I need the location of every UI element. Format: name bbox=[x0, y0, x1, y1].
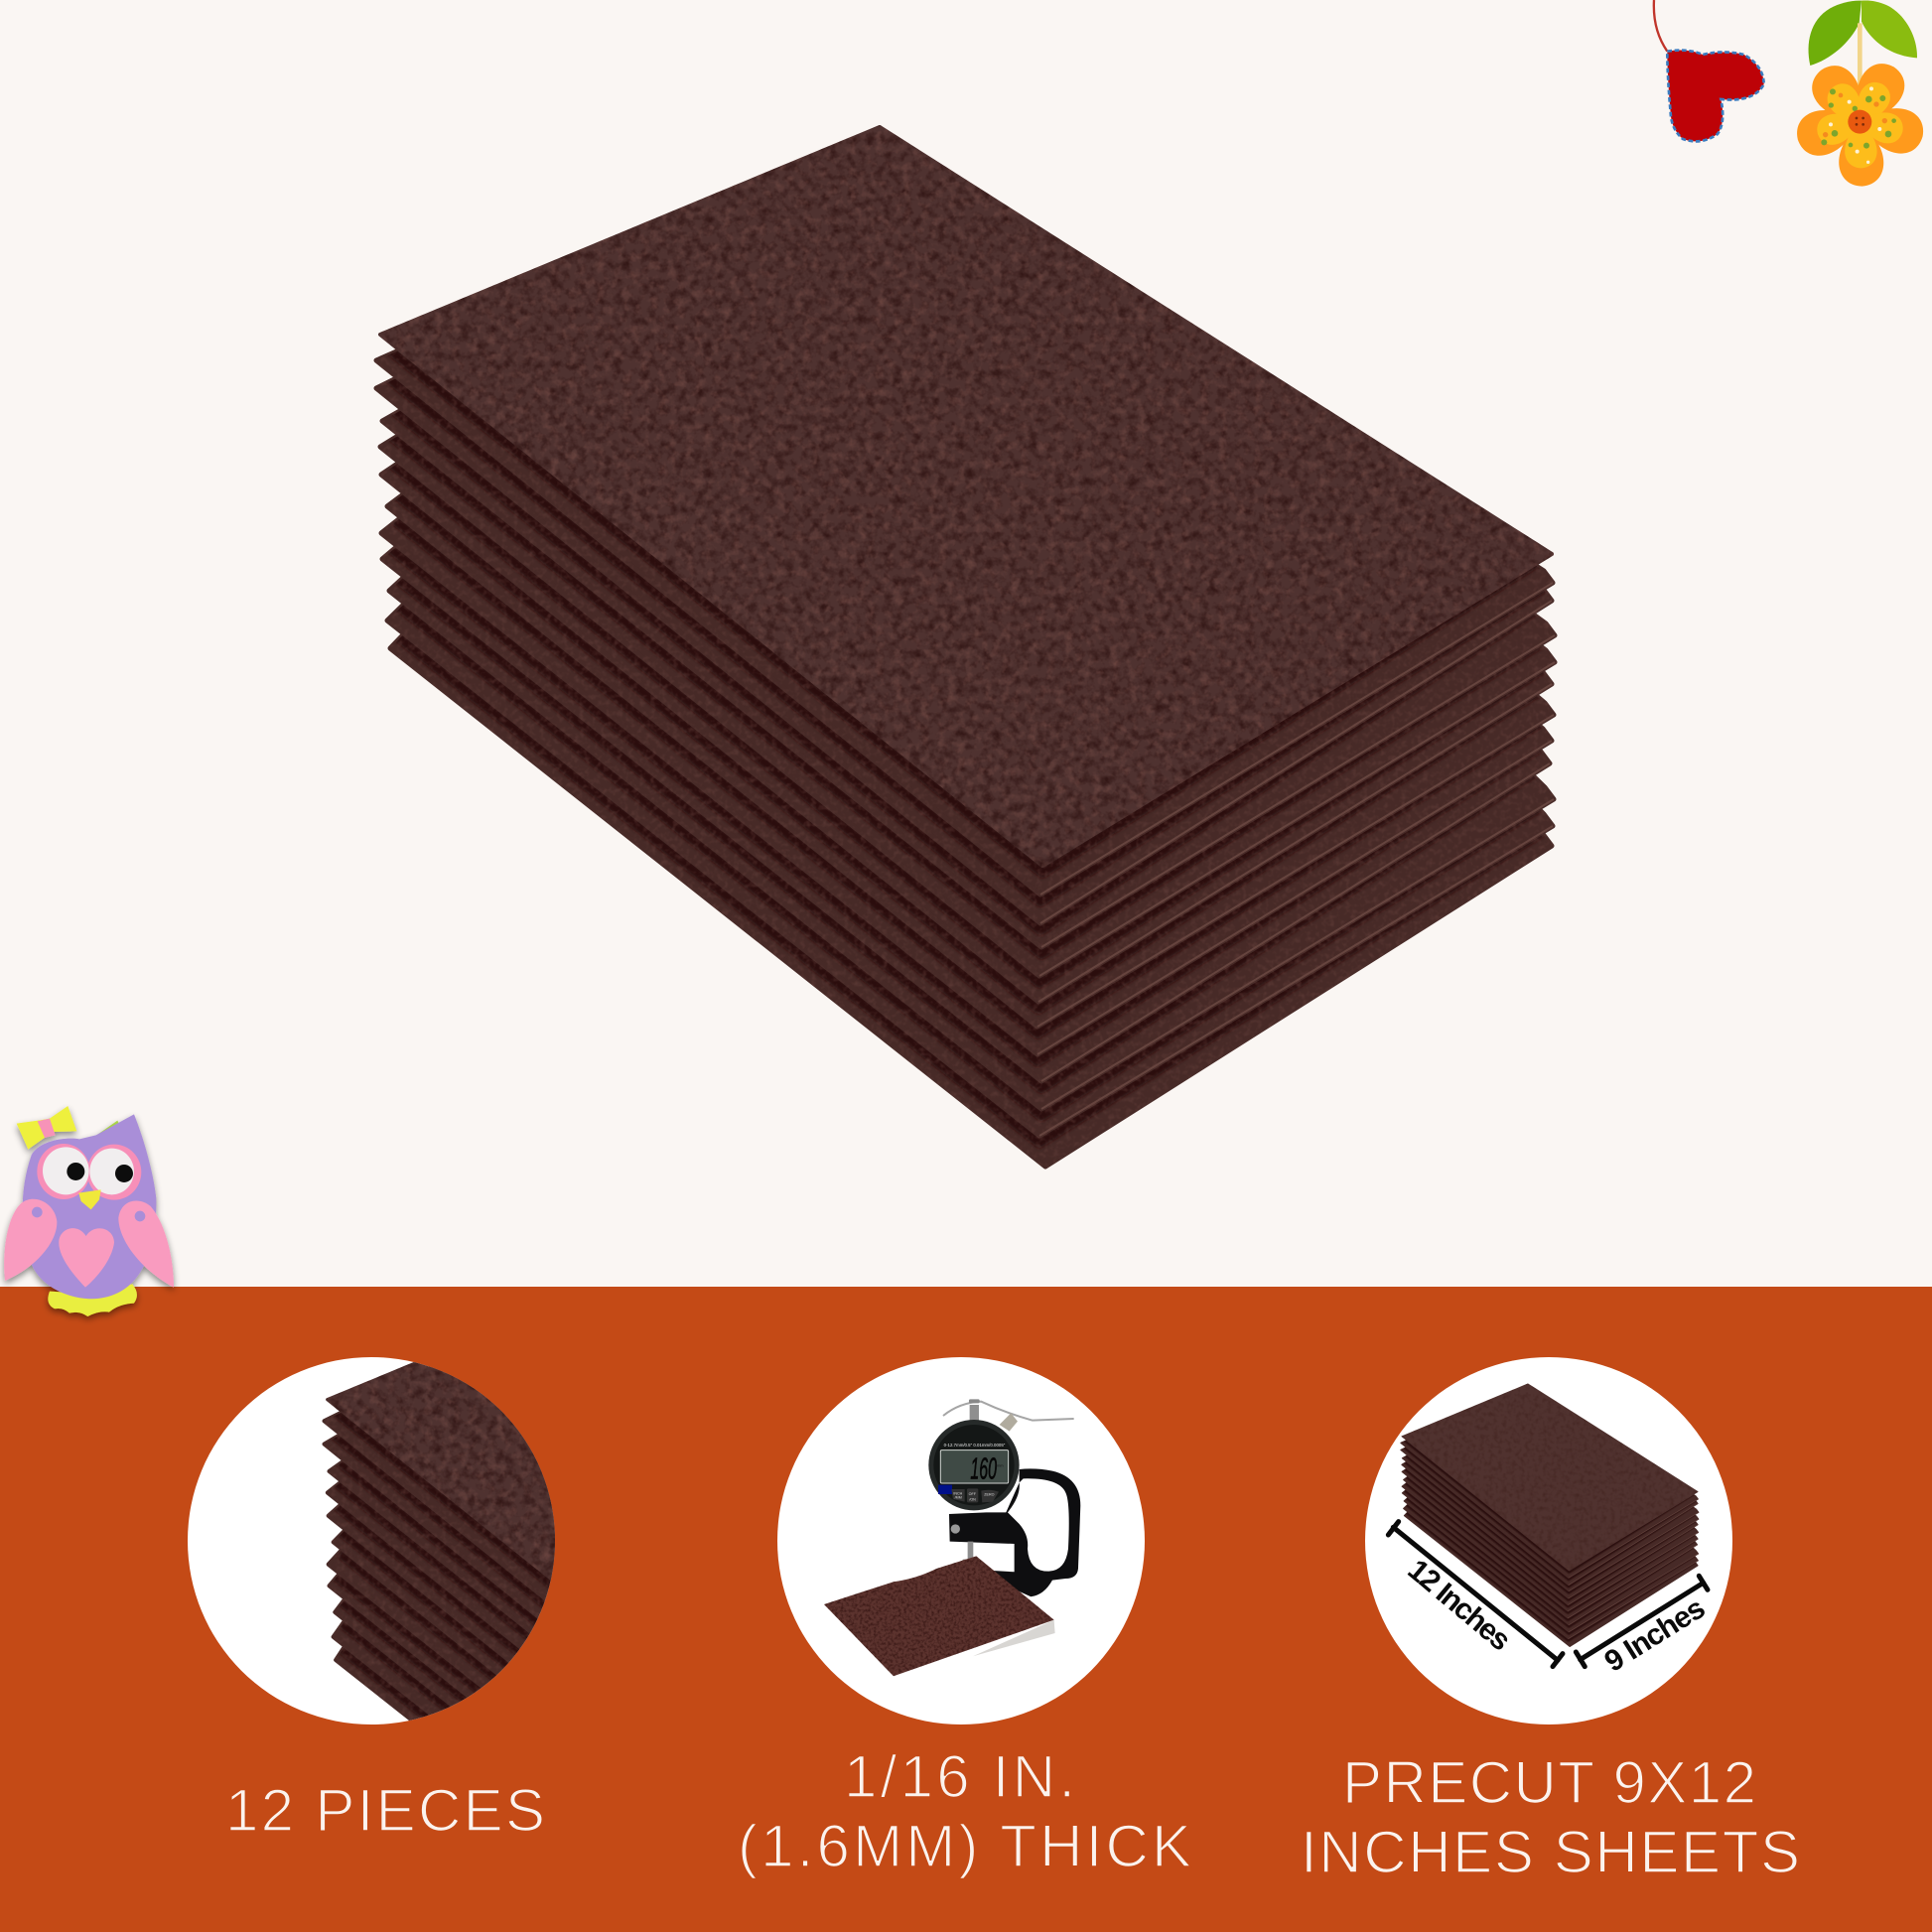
icon: digital thickness gauge on felt: /MM bbox=[955, 1495, 962, 1499]
panel: dimensions circle bbox=[1365, 1357, 1732, 1725]
dimension arrows and labels bbox=[1388, 1522, 1711, 1679]
caption: sheet size: INCHES SHEETS bbox=[1301, 1819, 1800, 1885]
caption: thickness bbox=[738, 1743, 1191, 1879]
panel: 12 pieces circle bbox=[188, 1357, 555, 1725]
top felt sheet bbox=[380, 127, 1552, 866]
caption: thickness: (1.6MM) THICK bbox=[738, 1813, 1191, 1879]
main stack of brown felt sheets bbox=[376, 127, 1555, 1167]
icon: digital thickness gauge on felt: 160 bbox=[970, 1452, 997, 1486]
owl heart bbox=[59, 1228, 114, 1288]
icon: digital thickness gauge on felt: INCH bbox=[953, 1491, 963, 1495]
icon: felt owl bbox=[4, 1106, 174, 1316]
owl eyes bbox=[37, 1144, 141, 1200]
icon: digital thickness gauge on felt bbox=[824, 1399, 1080, 1676]
panel: thickness gauge circle bbox=[777, 1357, 1145, 1725]
icon: digital thickness gauge on felt: mm bbox=[997, 1462, 1004, 1467]
cropped stack edge bbox=[322, 1362, 555, 1721]
icon: red felt heart bbox=[1654, 0, 1764, 141]
icon: digital thickness gauge on felt: ZERO bbox=[984, 1493, 995, 1497]
caption: sheet size: PRECUT 9X12 bbox=[1342, 1749, 1756, 1816]
owl beak bbox=[78, 1189, 101, 1209]
owl wings bbox=[4, 1199, 174, 1288]
caption: sheet size bbox=[1301, 1749, 1800, 1885]
caption: thickness: 1/16 IN. bbox=[844, 1743, 1075, 1810]
owl bow bbox=[17, 1106, 76, 1150]
dimension arrows and labels: 9 Inches bbox=[1599, 1591, 1711, 1679]
icon: digital thickness gauge on felt: OFF bbox=[969, 1492, 977, 1496]
owl body bbox=[23, 1114, 156, 1299]
small stack top sheet bbox=[1402, 1384, 1698, 1571]
icon: digital thickness gauge on felt: /ON bbox=[969, 1497, 976, 1501]
small felt stack bbox=[1401, 1384, 1699, 1646]
owl feet bbox=[48, 1284, 137, 1316]
icon: felt flower with leaves bbox=[1792, 0, 1928, 187]
background bbox=[0, 0, 1932, 1287]
orange footer band bbox=[0, 1287, 1932, 1932]
dimension arrows and labels: 12 Inches bbox=[1402, 1554, 1517, 1658]
owl wing buttons bbox=[32, 1207, 145, 1221]
icon: digital thickness gauge on felt: 0-12.7mm/0.5" 0.01mm/0.0005" bbox=[944, 1443, 1006, 1448]
caption: 12 pieces: 12 PIECES bbox=[225, 1777, 545, 1844]
